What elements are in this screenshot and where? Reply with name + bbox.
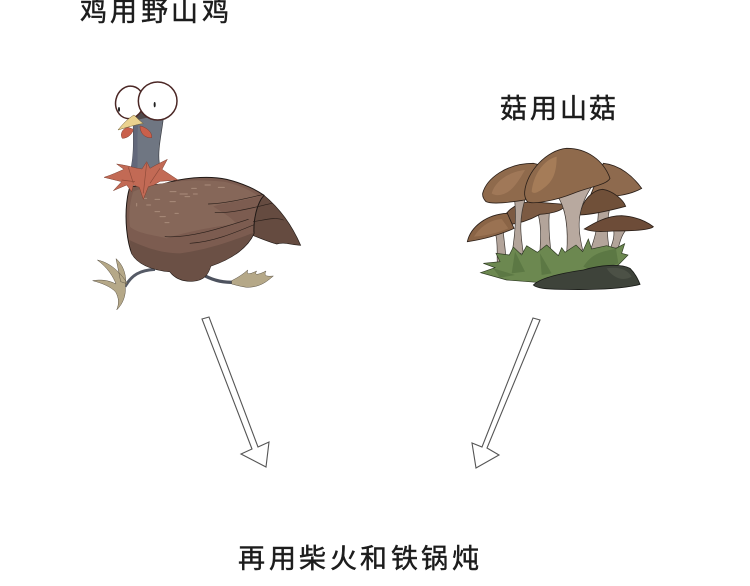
bottom caption: 再用柴火和铁锅炖 bbox=[238, 544, 479, 574]
large centre cap highlight bbox=[532, 157, 557, 193]
beak bbox=[118, 115, 143, 130]
body light patch bbox=[129, 180, 258, 238]
body bbox=[126, 177, 264, 281]
left eye bbox=[113, 83, 147, 121]
large centre cap bbox=[525, 148, 610, 203]
back right cap bbox=[590, 163, 642, 197]
head dark top bbox=[135, 106, 152, 120]
rock highlight bbox=[607, 268, 632, 279]
heading: mushroom: 菇用山菇 bbox=[500, 94, 616, 124]
far right cap bbox=[584, 216, 653, 232]
feather speckles bbox=[137, 185, 224, 223]
illustration: running pheasant bbox=[93, 82, 301, 310]
illustration: mushroom cluster bbox=[467, 148, 653, 290]
left large cap bbox=[483, 163, 540, 203]
middle cap bbox=[502, 202, 565, 225]
neck bbox=[131, 113, 163, 171]
centre tall stem bbox=[557, 187, 592, 253]
tail feathers bbox=[213, 195, 301, 245]
body lower shadow bbox=[129, 233, 254, 281]
far left mushroom stem bbox=[495, 232, 506, 263]
left large cap highlight bbox=[492, 170, 525, 195]
right eye bbox=[138, 82, 177, 120]
small right cap bbox=[580, 189, 626, 215]
neck shadow bbox=[131, 113, 139, 170]
feather marks bbox=[165, 195, 283, 243]
arrow: pheasant to pot bbox=[202, 317, 269, 467]
left tall stem bbox=[512, 197, 526, 253]
grass dark blades bbox=[493, 249, 618, 278]
wattle right bbox=[140, 126, 152, 138]
wattle left bbox=[121, 127, 133, 138]
feather collar bbox=[104, 159, 178, 199]
middle mushroom stem bbox=[537, 212, 551, 250]
far right stem bbox=[610, 228, 626, 249]
grass bbox=[481, 239, 628, 282]
arrow: mushroom to pot bbox=[472, 318, 540, 468]
far left cap bbox=[467, 213, 514, 242]
far left cap highlight bbox=[474, 219, 508, 237]
right stems bbox=[590, 210, 609, 251]
rock bbox=[533, 265, 640, 290]
back leg and foot bbox=[93, 259, 155, 310]
front leg and foot bbox=[202, 270, 273, 287]
